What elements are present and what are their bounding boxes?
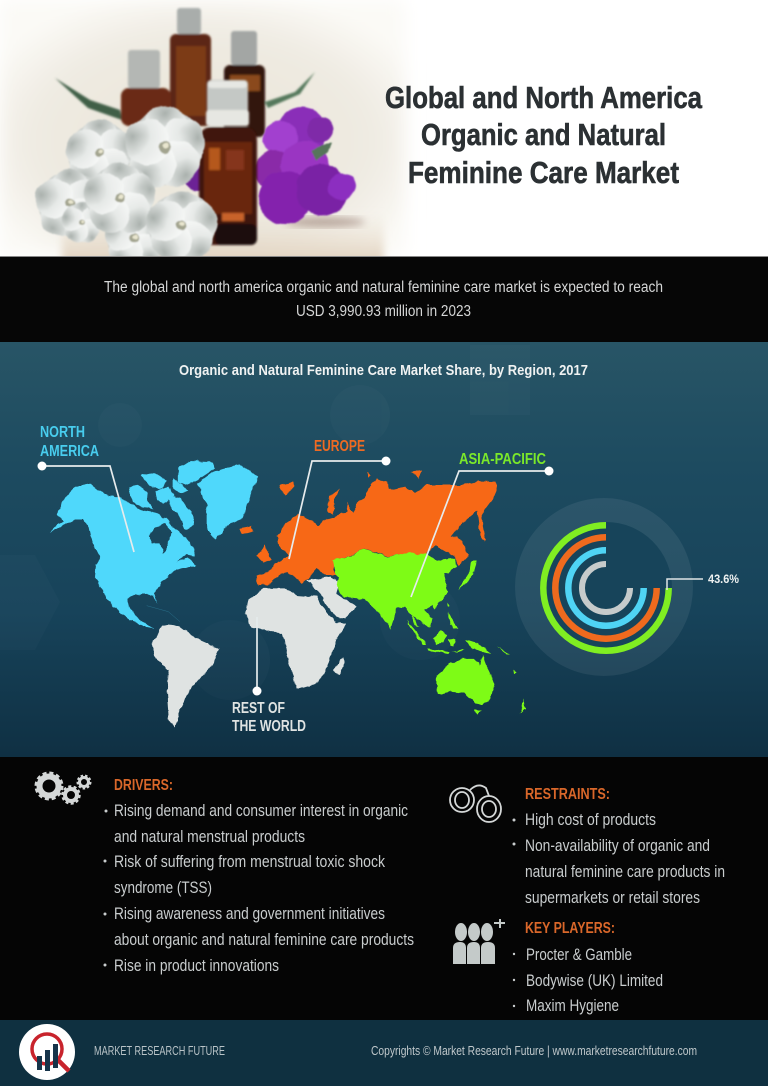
footer (0, 1020, 768, 1086)
key players list: Procter & Gamble (526, 945, 632, 964)
region: rest of the world (152, 577, 357, 727)
key players list: Bodywise (UK) Limited (526, 971, 663, 990)
icon: gears (36, 773, 90, 804)
title (385, 80, 703, 190)
title: Organic and Natural (421, 117, 666, 152)
intro text: The global and north america organic and natural feminine care market is expected to reach (104, 279, 663, 296)
panel: market share map (0, 342, 768, 757)
donut callout: 43.6% (708, 572, 739, 586)
drivers list: syndrome (TSS) (114, 878, 212, 897)
restraints list: Non-availability of organic and (525, 836, 710, 855)
panel: drivers (36, 773, 414, 975)
brand name: MARKET RESEARCH FUTURE (94, 1043, 225, 1058)
donut chart (515, 498, 739, 676)
intro text: USD 3,990.93 million in 2023 (296, 303, 471, 320)
panel: restraints (450, 785, 725, 907)
region: asia-pacific (333, 549, 525, 715)
key players list (513, 945, 663, 1015)
panel: key players (453, 919, 663, 1015)
label: rest of the world (232, 700, 306, 735)
drivers list (104, 801, 414, 975)
donut callout (667, 572, 739, 590)
restraints list: High cost of products (525, 810, 656, 829)
drivers list: about organic and natural feminine care products (114, 930, 414, 949)
purple flowers (184, 107, 356, 225)
label: north america (40, 424, 99, 460)
label: north america: AMERICA (40, 443, 99, 460)
leader lines (42, 461, 549, 691)
label: rest of the world: REST OF (232, 700, 285, 717)
restraints list: supermarkets or retail stores (525, 888, 700, 907)
drivers list: Rising demand and consumer interest in organic (114, 801, 408, 820)
drivers list: Risk of suffering from menstrual toxic shock (114, 852, 385, 871)
icon: handcuffs (450, 785, 501, 822)
region: north america (49, 461, 258, 628)
key players heading: KEY PLAYERS: (525, 920, 615, 937)
restraints list (512, 810, 725, 907)
key players list: Maxim Hygiene (526, 996, 619, 1015)
restraints list: natural feminine care products in (525, 862, 725, 881)
header white area (0, 0, 768, 257)
panel heading: Organic and Natural Feminine Care Market Share, by Region, 2017 (179, 362, 588, 379)
region: europe (240, 471, 497, 585)
title: Feminine Care Market (408, 155, 679, 190)
black intro band (0, 256, 768, 342)
icon: logo (19, 1024, 75, 1080)
intro text (104, 279, 663, 320)
label: north america: NORTH (40, 424, 85, 441)
drivers list: Rise in product innovations (114, 956, 279, 975)
drivers list: Rising awareness and government initiatives (114, 904, 385, 923)
icon: people (453, 919, 505, 964)
title: Global and North America (385, 80, 703, 115)
world map (38, 456, 554, 727)
restraints heading: RESTRAINTS: (525, 786, 610, 803)
label: europe: EUROPE (314, 438, 365, 455)
drivers heading: DRIVERS: (114, 777, 173, 794)
white flowers (31, 107, 223, 273)
drivers list: and natural menstrual products (114, 827, 305, 846)
label: asia-pacific: ASIA-PACIFIC (459, 451, 546, 468)
label: rest of the world: THE WORLD (232, 718, 306, 735)
photo: essential oil bottles and flowers (0, 0, 405, 273)
front bottle (199, 80, 257, 245)
